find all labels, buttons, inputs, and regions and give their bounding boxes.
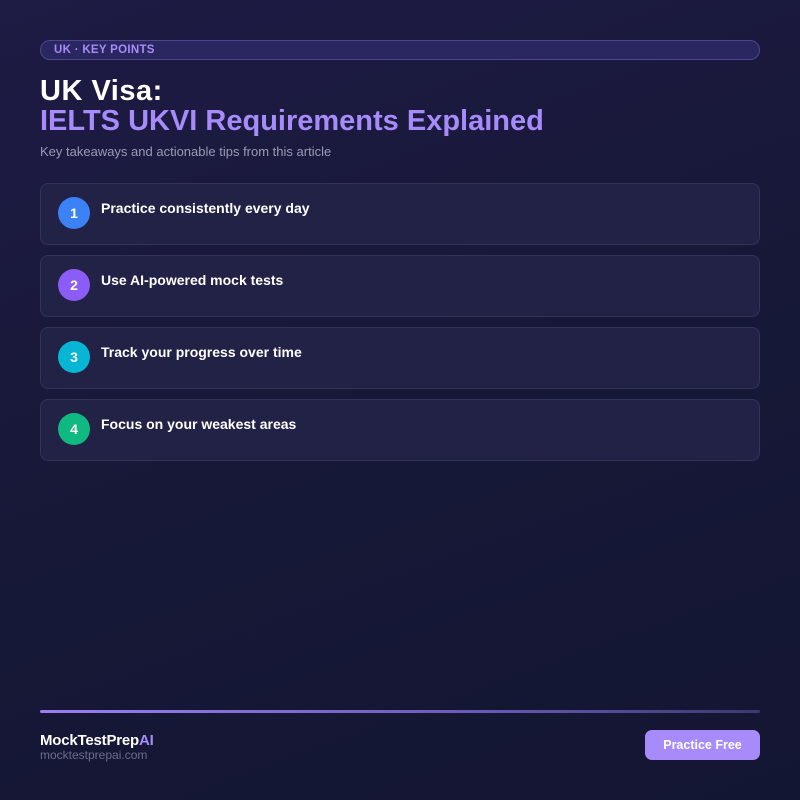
footer divider xyxy=(40,710,760,713)
subtitle: Key takeaways and actionable tips from this article xyxy=(40,144,331,159)
badge 2 xyxy=(58,269,90,301)
badge 2: 2 xyxy=(70,277,78,293)
card text 4: Focus on your weakest areas xyxy=(101,416,296,432)
badge 4: 4 xyxy=(70,421,78,437)
badge 3 xyxy=(58,341,90,373)
card text 1: Practice consistently every day xyxy=(101,200,310,216)
tag pill: UK · KEY POINTS xyxy=(54,44,155,56)
brand: MockTestPrepAI xyxy=(40,732,154,749)
badge 1: 1 xyxy=(70,205,78,221)
card 3 xyxy=(40,327,760,389)
button xyxy=(645,730,760,760)
title line 2: IELTS UKVI Requirements Explained xyxy=(40,105,544,137)
card 1 xyxy=(40,183,760,245)
badge 4 xyxy=(58,413,90,445)
tag pill xyxy=(40,40,760,60)
url: mocktestprepai.com xyxy=(40,748,147,762)
card text 2: Use AI-powered mock tests xyxy=(101,272,283,288)
card 2 xyxy=(40,255,760,317)
card 4 xyxy=(40,399,760,461)
badge 3: 3 xyxy=(70,349,78,365)
card text 3: Track your progress over time xyxy=(101,344,302,360)
title line 1: UK Visa: xyxy=(40,75,163,107)
button: Practice Free xyxy=(663,738,742,752)
badge 1 xyxy=(58,197,90,229)
